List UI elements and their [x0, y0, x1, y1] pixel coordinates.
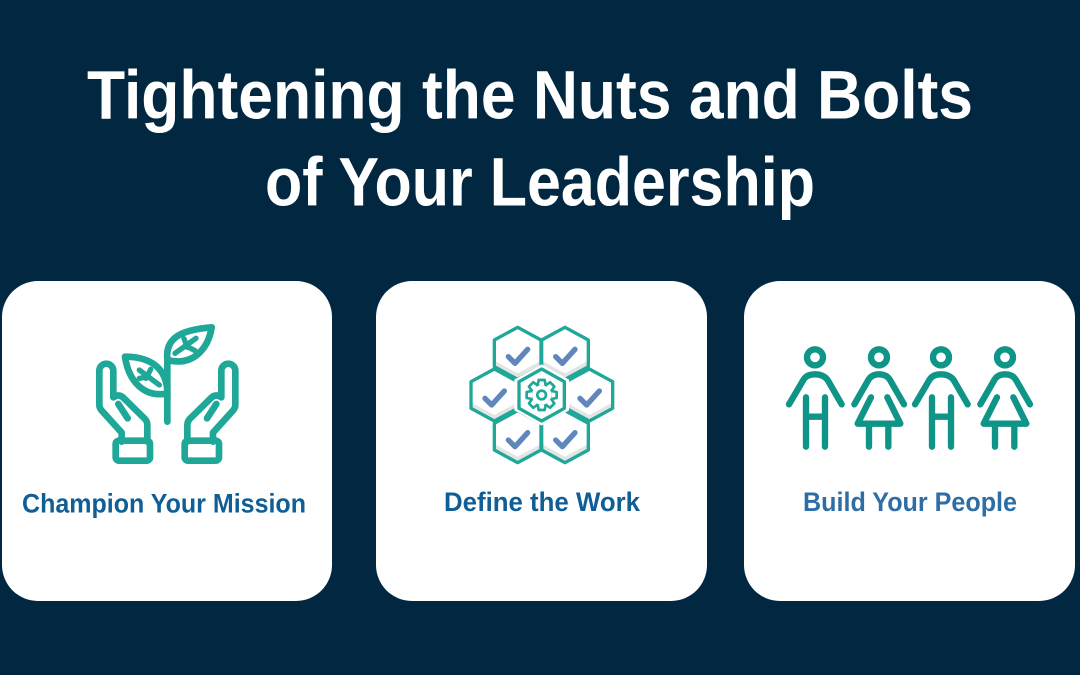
title	[87, 56, 973, 220]
label: Define the Work: Define the Work	[444, 487, 641, 517]
label: Build Your People: Build Your People	[803, 487, 1017, 517]
panel: Define the Work	[376, 281, 707, 601]
icon: hexagons with checks and gear	[471, 327, 613, 463]
icon: central gear	[514, 364, 569, 426]
panel: Champion Your Mission	[2, 281, 332, 601]
label: Champion Your Mission: Champion Your Mission	[22, 488, 306, 518]
panel: Build Your People	[744, 281, 1075, 601]
icon: hands holding plant	[99, 327, 235, 461]
title: of Your Leadership	[265, 144, 815, 220]
icon: four people	[789, 349, 1030, 447]
title: Tightening the Nuts and Bolts	[87, 56, 973, 134]
